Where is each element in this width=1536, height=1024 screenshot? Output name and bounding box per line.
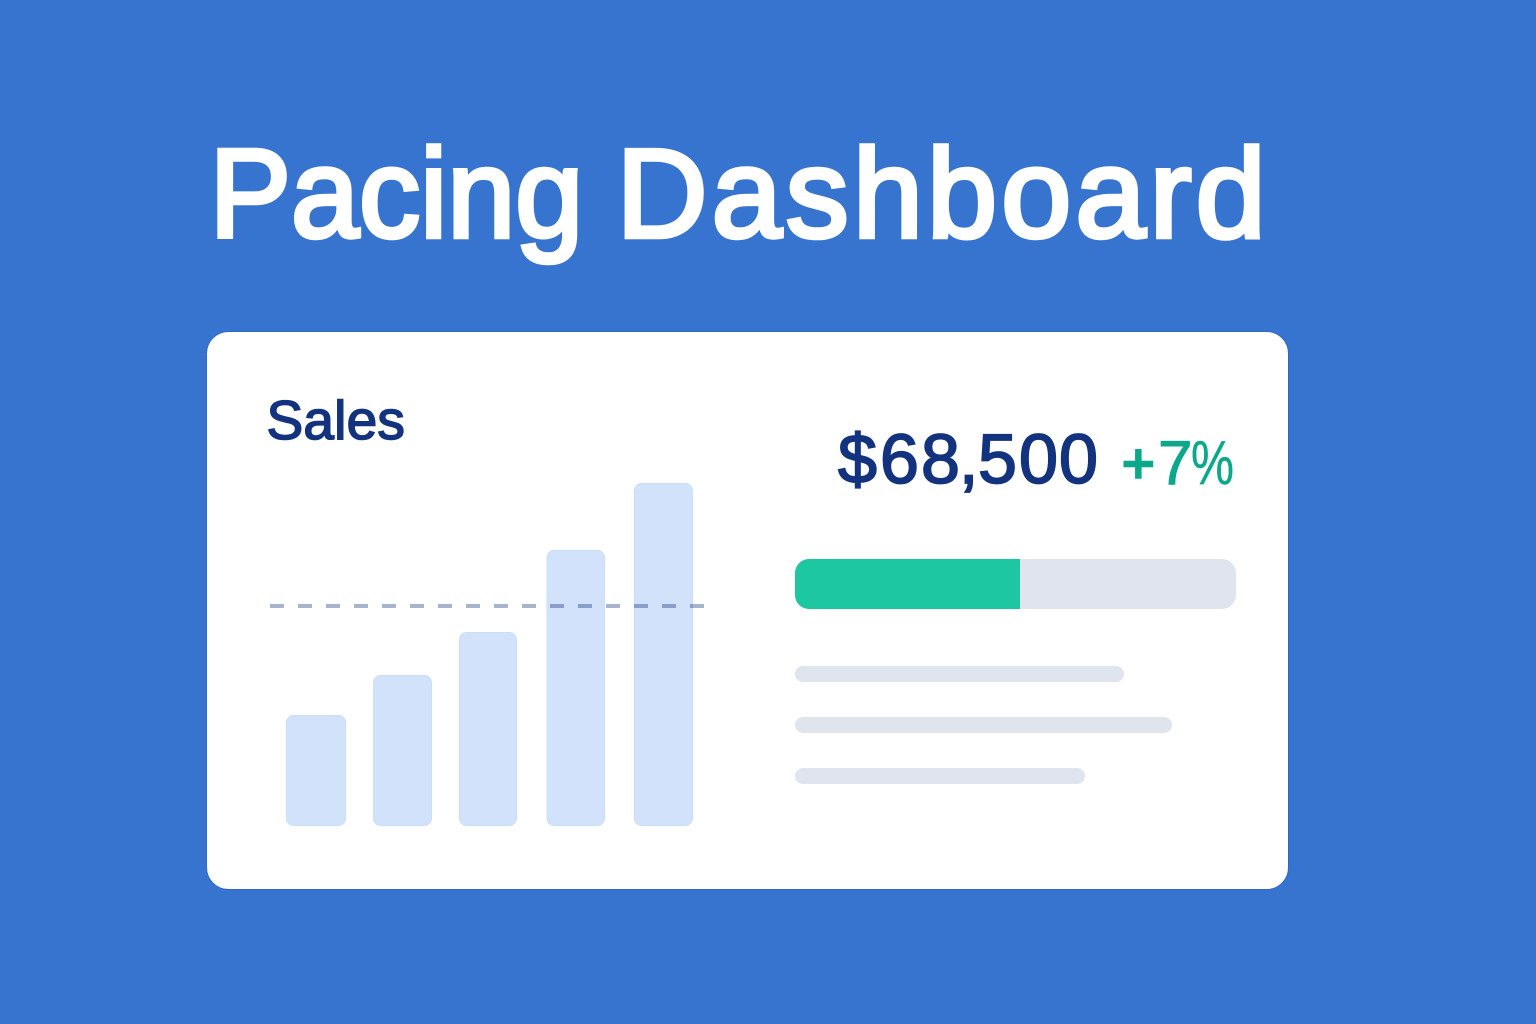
placeholder text lines bbox=[795, 666, 1172, 784]
percentage change: % bbox=[1191, 428, 1234, 497]
heading: Sales: Sales bbox=[266, 389, 405, 451]
percentage change: 7 bbox=[1158, 429, 1192, 498]
percentage change: + bbox=[1122, 432, 1155, 494]
title: Dashboard bbox=[616, 123, 1270, 264]
target line bbox=[270, 604, 706, 608]
title: Pacing bbox=[210, 124, 583, 264]
progress bar bbox=[795, 559, 1236, 609]
bar chart bbox=[270, 484, 706, 826]
percentage change bbox=[1122, 428, 1234, 498]
sales value: $68,500 bbox=[838, 420, 1098, 498]
title bbox=[210, 123, 1270, 264]
panel: sales card bbox=[206, 332, 1288, 890]
